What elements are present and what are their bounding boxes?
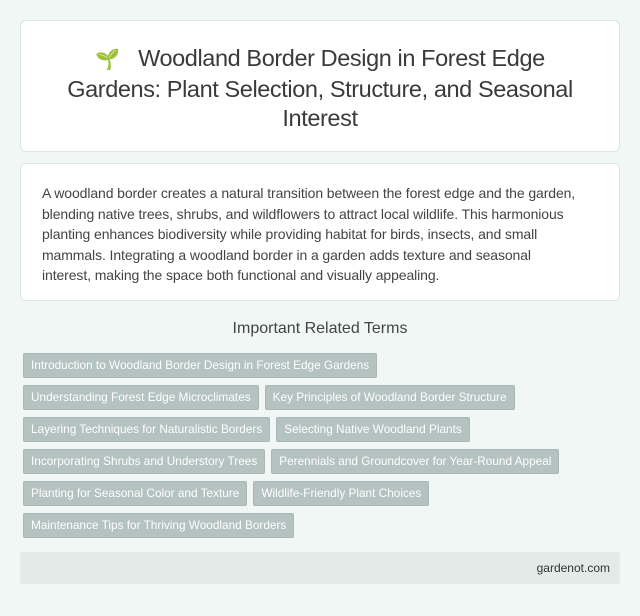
tags: Introduction to Woodland Border Design in Forest Edge Gardens [31,358,369,372]
tags: Incorporating Shrubs and Understory Trees [31,454,257,468]
footer [20,552,620,584]
description text: A woodland border creates a natural transition between the forest edge and the garden, blending native trees, shrubs, and wildflowers to attract local wildlife. This harmonious planting enhances biodiversity while providing habitat for birds, insects, and small mammals. Integrating a woodland border in a garden adds texture and seasonal interest, making the space both functional and visually appealing. [42,185,575,283]
description card [20,163,620,301]
title: 🌱 Woodland Border Design in Forest Edge Gardens: Plant Selection, Structure, and Seasonal Interest [67,45,573,131]
tags: Maintenance Tips for Thriving Woodland Borders [31,518,286,532]
tags: Selecting Native Woodland Plants [284,422,462,436]
tags: Understanding Forest Edge Microclimates [31,390,251,404]
tags: Wildlife-Friendly Plant Choices [261,486,421,500]
section heading: Important Related Terms [233,320,407,337]
tags: Perennials and Groundcover for Year-Round Appeal [279,454,551,468]
title card [20,20,620,152]
footer: gardenot.com [537,561,610,575]
tags: Planting for Seasonal Color and Texture [31,486,239,500]
tags: Layering Techniques for Naturalistic Borders [31,422,262,436]
tags: Key Principles of Woodland Border Structure [273,390,507,404]
